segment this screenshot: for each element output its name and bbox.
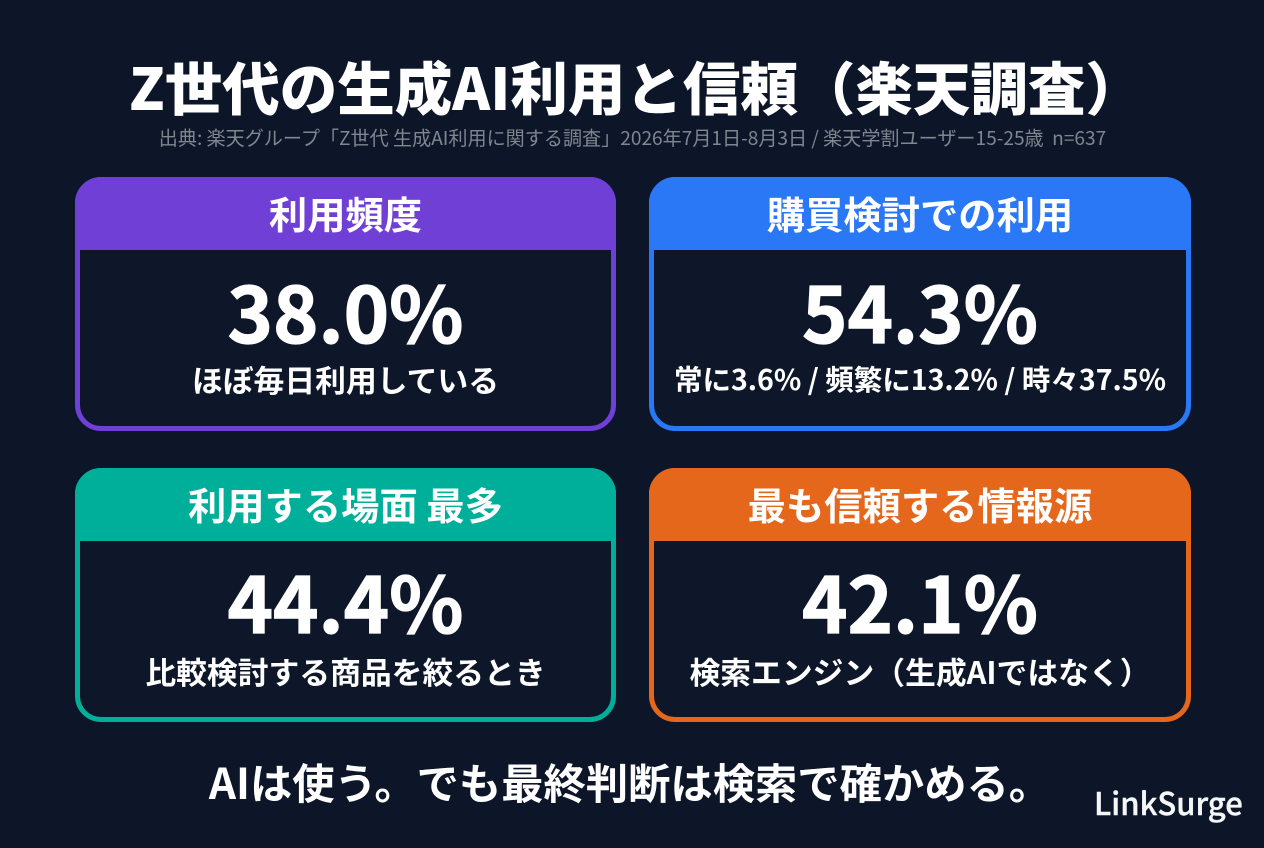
panel heading: usage frequency: 利用頻度	[269, 186, 422, 241]
panel: usage scene	[75, 468, 616, 722]
title: Z世代の生成AI利用と信頼（楽天調査）	[129, 43, 1143, 127]
panel heading: usage scene: 利用する場面 最多	[188, 477, 503, 532]
panel heading: most trusted source: 最も信頼する情報源	[748, 477, 1092, 532]
panel: usage frequency	[75, 177, 616, 431]
stat: 38.0%: 38.0%	[227, 254, 464, 366]
caption: usage frequency: ほぼ毎日利用している	[192, 356, 499, 401]
brand: LinkSurge: LinkSurge	[1094, 779, 1243, 824]
stat: 54.3%: 54.3%	[802, 254, 1038, 366]
panel: purchase consideration	[649, 177, 1191, 431]
caption: usage scene: 比較検討する商品を絞るとき	[145, 648, 546, 693]
panel heading: most trusted source	[649, 468, 1191, 541]
stat: 44.4%: 44.4%	[227, 544, 464, 656]
source note: 出典: 楽天グループ「Z世代 生成AI利用に関する調査」2026年7月1日-8月3日 / 楽天学割ユーザー15-25歳 n=637	[159, 123, 1106, 151]
caption: most trusted source: 検索エンジン（生成AIではなく）	[689, 648, 1151, 693]
panel heading: usage frequency	[75, 177, 616, 250]
conclusion: AIは使う。でも最終判断は検索で確かめる。	[209, 751, 1051, 812]
panel heading: purchase consideration: 購買検討での利用	[767, 186, 1073, 241]
stat: 42.1%: 42.1%	[802, 544, 1038, 656]
panel heading: purchase consideration	[649, 177, 1191, 250]
panel: most trusted source	[649, 468, 1191, 722]
panel heading: usage scene	[75, 468, 616, 541]
caption: purchase consideration: 常に3.6% / 頻繁に13.2% / 時々37.5%	[674, 358, 1166, 399]
